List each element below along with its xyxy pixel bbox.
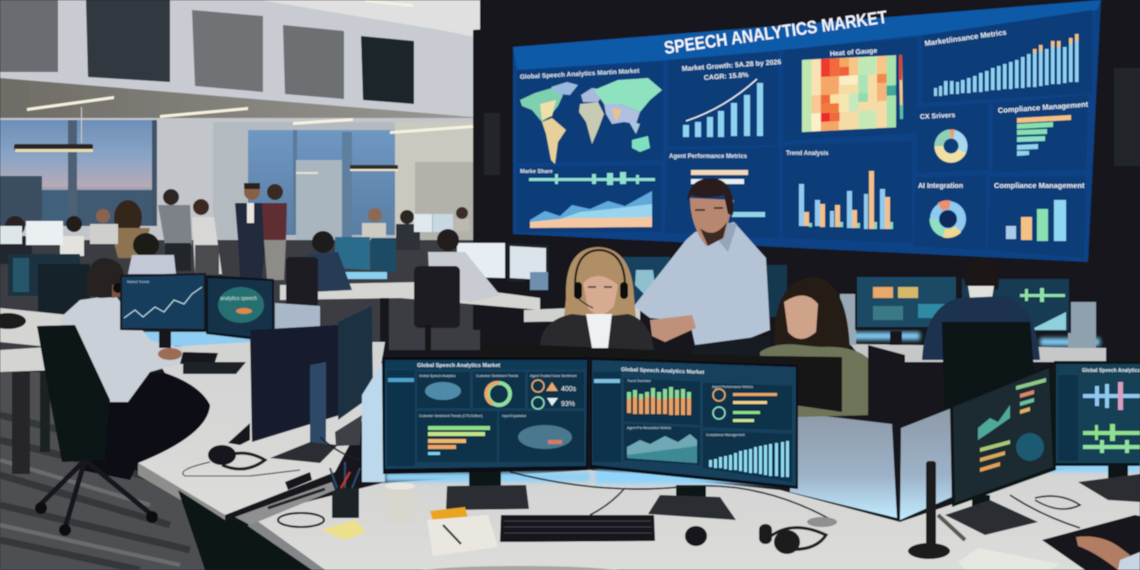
panel: agent performance metrics xyxy=(665,147,779,238)
orange sticky notes xyxy=(430,507,468,521)
right back monitors xyxy=(855,275,1071,345)
monitor: word cloud: analytics speech xyxy=(220,296,257,302)
partitions with blue glow xyxy=(790,332,1140,520)
panel: market insights metrics xyxy=(922,10,1092,103)
panel: AI integration: AI Integration xyxy=(918,183,963,190)
panel: trend analysis xyxy=(783,141,912,243)
power strip and cable coil xyxy=(235,472,335,527)
standing man xyxy=(634,178,770,356)
carpet floor xyxy=(0,372,215,570)
paper sheet xyxy=(958,548,1060,570)
monitor back behind center pair xyxy=(485,343,905,425)
center-left monitor: 93% xyxy=(561,401,575,408)
left foreground worker xyxy=(35,258,246,536)
monitor: market line chart xyxy=(120,273,206,348)
black keyboard xyxy=(500,515,655,542)
left desk with blue glow partition xyxy=(80,303,385,570)
hand on keyboard xyxy=(1076,536,1130,570)
desk behind center team xyxy=(840,294,1106,362)
center-left monitor: Customer Sentiment Trends (CTS.Edition) xyxy=(419,414,483,418)
main desk xyxy=(248,462,1140,570)
panel: market growth xyxy=(668,52,782,147)
cable tray puck xyxy=(807,517,837,527)
light partition beside monitors xyxy=(362,358,385,482)
screen title: SPEECH ANALYTICS MARKET xyxy=(663,7,888,58)
center-left monitor: Global Speech Analytics Market xyxy=(417,363,500,369)
windows with city view xyxy=(0,107,398,226)
monitor cables xyxy=(320,437,1080,528)
desk items xyxy=(183,437,1140,570)
video wall screen xyxy=(513,0,1101,262)
center-left monitor: 400s xyxy=(561,386,577,393)
panel: CX drivers: CX Srivers xyxy=(920,112,956,121)
center-right monitor: Compliance Management xyxy=(706,433,745,437)
panel: compliance management horizontal bars xyxy=(993,95,1089,172)
center-left monitor: Global Speech Analytics xyxy=(419,374,456,378)
center-left monitor xyxy=(382,357,589,510)
acoustic wall panels xyxy=(0,0,414,104)
center-left monitor: Customer Sentiment Trends xyxy=(476,374,519,378)
shirt cuff xyxy=(1118,552,1140,570)
center woman with headset xyxy=(540,247,654,350)
panel: heat map: Heat of Gauge xyxy=(830,48,878,58)
center-left monitor: Input Expansion xyxy=(502,414,526,418)
computer mouse xyxy=(685,526,707,546)
center-right monitor: Agent Performance Metrics xyxy=(712,385,753,389)
black headset on desk xyxy=(759,524,826,554)
panel: agent performance metrics: Agent Performance Metrics xyxy=(669,154,748,160)
background desks and workers xyxy=(280,229,640,356)
center-right monitor: Trend Overview xyxy=(627,379,651,383)
coffee mug xyxy=(378,482,415,524)
yellow sticky notes xyxy=(321,520,366,540)
center-right monitor xyxy=(590,357,798,520)
right keyboard xyxy=(1042,515,1140,570)
panel: compliance management horizontal bars: Compliance Management xyxy=(998,100,1089,115)
panel: market growth: CAGR: 15.8% xyxy=(704,72,750,82)
desk phone microphone xyxy=(908,461,965,559)
notebook with pen xyxy=(427,515,498,556)
monitor: market line chart: Market Trends xyxy=(127,280,150,284)
right back worker xyxy=(922,258,1040,408)
panel: market share waveform: Marke Share xyxy=(520,169,553,175)
center-right monitor: Agent Pre-Resolution Metrics xyxy=(627,426,671,430)
center-right monitor: Global Speech Analytics Market xyxy=(621,367,704,376)
monitor: word cloud xyxy=(206,275,274,342)
panel: CX drivers xyxy=(917,103,988,173)
right woman xyxy=(760,277,873,418)
panel: AI integration xyxy=(913,175,986,250)
right angled monitor xyxy=(945,364,1056,535)
left desk headset xyxy=(183,445,300,476)
panel: global map xyxy=(517,62,663,164)
center-left monitor: Agent Trusted Voice Sentiment xyxy=(530,374,577,378)
video wall housing xyxy=(473,0,1140,360)
panel: market share waveform xyxy=(517,165,662,232)
background monitors xyxy=(0,214,787,318)
far right monitor xyxy=(1054,361,1140,502)
dark monitor backs xyxy=(228,306,373,463)
rear left desks xyxy=(0,308,142,474)
pen cup xyxy=(330,462,360,518)
ceiling lights xyxy=(27,0,473,134)
panel: heat map xyxy=(783,38,917,141)
panel: market insights metrics: Market/insance Metrics xyxy=(924,28,1007,48)
panel: market growth: Market Growth: 5A.28 by 2026 xyxy=(682,59,782,73)
panel: trend analysis: Trend Analysis xyxy=(786,151,829,157)
panel: global map: Global Speech Analytics Martin Market xyxy=(520,68,640,81)
background people group xyxy=(0,183,469,280)
panel: compliance management columns: Compliance Management xyxy=(994,181,1085,190)
panel: compliance management columns xyxy=(988,176,1086,258)
